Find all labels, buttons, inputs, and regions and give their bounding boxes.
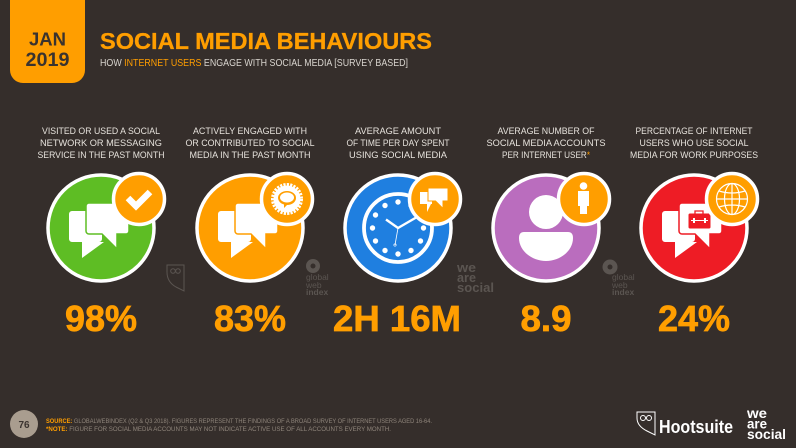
- watermark: global web index 2: global: [612, 272, 635, 282]
- value: 83%: [214, 298, 286, 339]
- label text: [38, 126, 165, 161]
- value: 8.9: [520, 298, 572, 339]
- badge: chat: [410, 174, 460, 224]
- watermark: global web index 2: [602, 260, 635, 297]
- panel: work purposes: [630, 126, 758, 339]
- label text: PER INTERNET USER*: [502, 150, 590, 161]
- watermark: global web index 2: index: [612, 287, 634, 297]
- page number: 76: [18, 420, 30, 431]
- logo: we are social: we: [746, 405, 767, 421]
- label text: SERVICE IN THE PAST MONTH: [38, 150, 165, 161]
- label text: SOCIAL MEDIA ACCOUNTS: [486, 138, 606, 149]
- main circle: [197, 175, 303, 281]
- label text: AVERAGE NUMBER OF: [498, 126, 595, 137]
- badge: globe: [706, 174, 758, 224]
- logo: hootsuite: [637, 412, 733, 437]
- title: SOCIAL MEDIA BEHAVIOURS: [100, 28, 432, 54]
- label text: PERCENTAGE OF INTERNET: [636, 126, 753, 137]
- icon: person: [519, 195, 573, 261]
- main circle: [345, 175, 451, 281]
- label text: ACTIVELY ENGAGED WITH: [193, 126, 307, 137]
- label text: OF TIME PER DAY SPENT: [346, 138, 450, 149]
- label text: USING SOCIAL MEDIA: [349, 150, 448, 161]
- value: 2H 16M: [333, 298, 461, 339]
- watermark: global web index 1: web: [305, 280, 322, 290]
- watermark: global web index 1: index: [306, 287, 328, 297]
- label text: MEDIA FOR WORK PURPOSES: [630, 150, 758, 161]
- logo: hootsuite: Hootsuite: [659, 416, 733, 437]
- panel: accounts per user: [486, 126, 610, 339]
- icon: clock: [364, 194, 432, 262]
- panel: time per day: [333, 126, 461, 339]
- date badge: [10, 0, 85, 83]
- source note: SOURCE: GLOBALWEBINDEX (Q2 & Q3 2018). FIGURES REPRESENT THE FINDINGS OF A BROAD SURVEY OF INTERNET USERS AGED 16-64.: [46, 418, 432, 425]
- label text: VISITED OR USED A SOCIAL: [42, 126, 161, 137]
- watermark: owl: [167, 265, 184, 291]
- date badge: JAN: [29, 30, 66, 50]
- badge: check: [114, 174, 164, 224]
- date badge: 2019: [26, 50, 70, 71]
- page number: [10, 410, 38, 438]
- panel: visited or used: [38, 126, 165, 339]
- label text: MEDIA IN THE PAST MONTH: [190, 150, 311, 161]
- watermark: global web index 2: web: [611, 280, 628, 290]
- source note: [46, 418, 432, 433]
- icon: chat bubbles: [69, 203, 129, 258]
- label text: USERS WHO USE SOCIAL: [640, 138, 749, 149]
- value: 24%: [658, 298, 730, 339]
- icon: chat bubbles with briefcase: [662, 203, 722, 258]
- watermark: global web index 1: [305, 259, 329, 297]
- badge: engagement seal: [262, 174, 312, 224]
- logo: we are social: social: [747, 426, 786, 442]
- label text: OR CONTRIBUTED TO SOCIAL: [186, 138, 315, 149]
- watermark: we are social: social: [457, 280, 494, 295]
- watermark: we are social: are: [457, 270, 476, 285]
- label text: [630, 126, 758, 161]
- label text: [486, 126, 606, 161]
- main circle: [641, 175, 747, 281]
- label text: [346, 126, 450, 161]
- watermark: we are social: [456, 260, 494, 295]
- main circle: [48, 175, 154, 281]
- subtitle: HOW INTERNET USERS ENGAGE WITH SOCIAL MEDIA [SURVEY BASED]: [100, 58, 408, 69]
- label text: [186, 126, 315, 161]
- main circle: [493, 175, 599, 281]
- label text: NETWORK OR MESSAGING: [40, 138, 162, 149]
- watermark: we are social: we: [456, 260, 476, 275]
- watermark: global web index 1: global: [306, 272, 329, 282]
- value: 98%: [65, 298, 137, 339]
- source note: *NOTE: FIGURE FOR SOCIAL MEDIA ACCOUNTS MAY NOT INDICATE ACTIVE USE OF ALL ACCOUNTS EVERY MONTH.: [46, 426, 391, 433]
- logo: we are social: [746, 405, 786, 442]
- icon: chat bubbles: [218, 203, 278, 258]
- label text: AVERAGE AMOUNT: [355, 126, 441, 137]
- logo: we are social: are: [747, 416, 767, 432]
- badge: person: [558, 174, 610, 224]
- panel: actively engaged: [186, 126, 315, 339]
